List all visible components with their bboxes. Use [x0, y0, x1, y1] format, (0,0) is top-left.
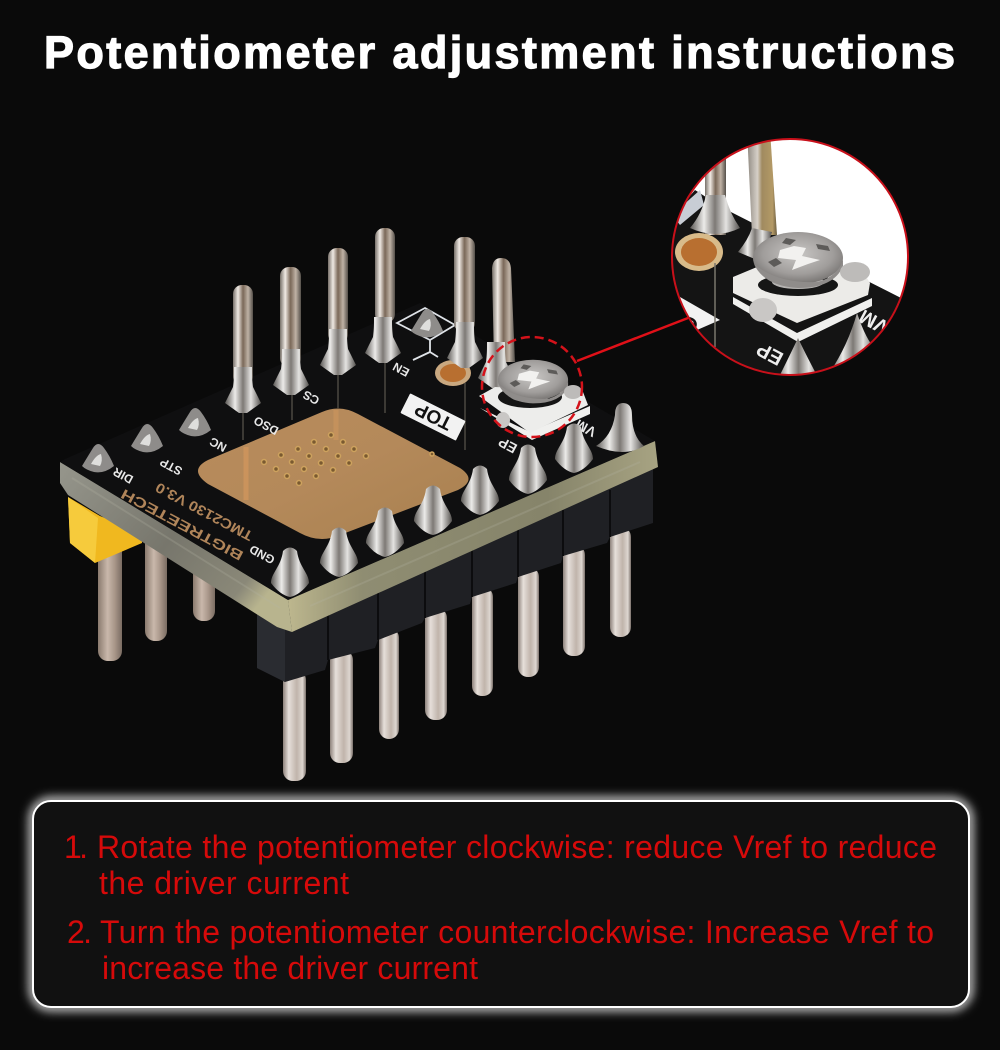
inset pins [705, 159, 726, 235]
silkscreen labels: EP [496, 434, 520, 457]
TOP label [400, 392, 466, 441]
front solder joints [271, 403, 644, 597]
silkscreen labels: DIR [110, 464, 136, 487]
traces [243, 363, 465, 450]
step 2 text: increase the driver current [102, 950, 478, 986]
stepper driver board photo illustration [60, 228, 658, 781]
brand text [118, 479, 255, 564]
title: Potentiometer adjustment instructions [44, 27, 955, 78]
instruction panel [33, 801, 969, 1007]
magnified potentiometer inset [665, 130, 908, 385]
pad highlights [244, 447, 248, 500]
callout line [577, 318, 688, 361]
inset TOP label [680, 297, 720, 330]
EN footprint outline [397, 308, 455, 360]
silkscreen labels: DSO [251, 413, 281, 438]
board edge [60, 441, 658, 632]
inset labels: VM [856, 305, 893, 338]
copper thermal pad [198, 408, 469, 539]
inset screw [753, 232, 843, 288]
step 1 text: the driver current [99, 865, 349, 901]
board top surface [60, 303, 655, 600]
brand text: TMC2130 V3.0 [152, 479, 255, 544]
step 2 text: 2. [67, 914, 92, 950]
black pin header [257, 440, 653, 682]
upper pins [233, 228, 515, 385]
pad via grid [262, 432, 434, 486]
inset white trimmer base [733, 297, 872, 342]
step 2 text: Turn the potentiometer counterclockwise: Increase Vref to [100, 914, 934, 950]
rear bottom pins [98, 530, 215, 661]
gold via hole [435, 360, 471, 386]
step 1 text [64, 829, 937, 901]
step 1 text: Rotate the potentiometer clockwise: reduce Vref to reduce [97, 829, 937, 865]
magnified potentiometer inset: O [676, 310, 702, 340]
inset hole [675, 233, 723, 271]
brand text: BIGTREETECH [118, 486, 246, 564]
step 1 text: 1. [64, 829, 88, 865]
silkscreen labels: VM [573, 416, 599, 440]
inset solder joints [780, 338, 815, 374]
silkscreen labels: STP [158, 455, 185, 478]
silkscreen labels: CS [300, 387, 322, 408]
silkscreen labels [110, 359, 599, 567]
red dashed highlight circle [482, 337, 582, 437]
yellow jumper [68, 497, 142, 563]
TOP label: TOP [411, 397, 456, 434]
silkscreen labels: EN [390, 359, 412, 380]
magnified potentiometer inset: EP [753, 337, 787, 369]
silkscreen labels: NC [207, 434, 229, 455]
inset board [665, 190, 905, 380]
step 2 text [67, 914, 934, 986]
silkscreen labels: GND [247, 542, 277, 567]
front bottom pins [283, 527, 631, 781]
potentiometer [479, 360, 590, 440]
rear solder joints [82, 309, 514, 472]
